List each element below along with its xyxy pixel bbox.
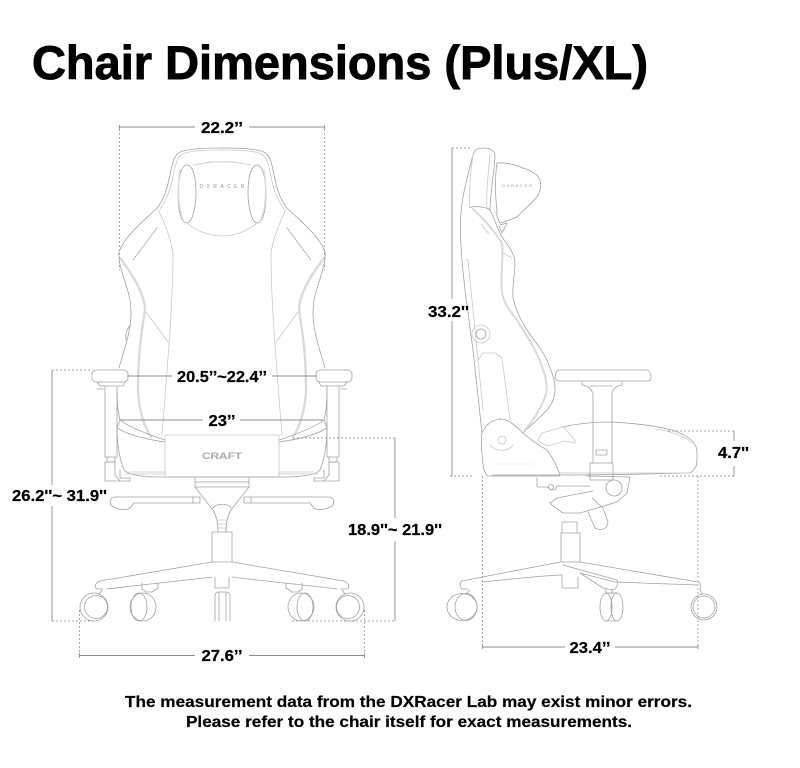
seat front panel [165, 435, 279, 477]
seat mechanism and gas lift [165, 477, 279, 562]
armrest [555, 370, 651, 480]
dimension: seat thickness 4.7 [660, 431, 749, 476]
seat label: CRAFT [202, 451, 242, 462]
back details [466, 155, 512, 420]
dimension: seat width 23: 23’’ [208, 413, 236, 430]
footnote [125, 694, 692, 731]
tilt mechanism [537, 476, 630, 530]
footnote: Please refer to the chair itself for exact measurements. [186, 714, 632, 731]
dimension: base width 27.6 [80, 610, 364, 665]
back shell [460, 148, 495, 433]
chair back shell, left half [117, 148, 222, 437]
dimension: seat height 18.9~21.9 [292, 438, 442, 621]
chair back shell, right half [222, 148, 327, 437]
seat hinge [481, 419, 560, 476]
five-star base [95, 562, 349, 594]
recline knob [472, 325, 490, 343]
dimension: seat depth 23.4: 23.4’’ [570, 640, 610, 657]
dimension: seat depth 23.4 [482, 476, 698, 657]
title: Chair Dimensions (Plus/XL) [32, 36, 648, 89]
seat cushion [492, 422, 697, 475]
back front edge [470, 207, 555, 433]
dimension: top width 22.2: 22.2’’ [201, 120, 243, 137]
headrest logo: DXRACER [200, 184, 245, 190]
gas lift [561, 522, 580, 562]
front view chair [80, 148, 364, 621]
footnote: The measurement data from the DXRacer Lab may exist minor errors. [125, 694, 692, 711]
dimension: seat height 18.9~21.9: 18.9''~ 21.9'' [348, 522, 442, 539]
headrest logo: DXRACER [502, 183, 532, 188]
dimension: arm height 26.2~31.9: 26.2''~ 31.9'' [12, 488, 107, 505]
left armrest and seat half [92, 370, 200, 510]
dimension: seat thickness 4.7: 4.7'' [718, 445, 749, 462]
dimension: back height 33.2: 33.2'' [428, 304, 469, 321]
casters [80, 592, 364, 621]
casters [447, 593, 717, 621]
dimension: top width 22.2 [120, 120, 324, 270]
headrest [496, 163, 541, 233]
side view chair [447, 148, 717, 621]
five-star base [460, 562, 702, 594]
dimension: base width 27.6: 27.6’’ [202, 648, 242, 665]
back piping [473, 209, 547, 430]
right armrest and seat half [244, 370, 352, 510]
dimension: arm height 26.2~31.9 [12, 370, 107, 621]
dimension: back height 33.2 [428, 148, 472, 476]
dimension: arm width 20.5~22.4: 20.5’’~22.4’’ [177, 369, 267, 386]
recline lever [538, 427, 575, 446]
